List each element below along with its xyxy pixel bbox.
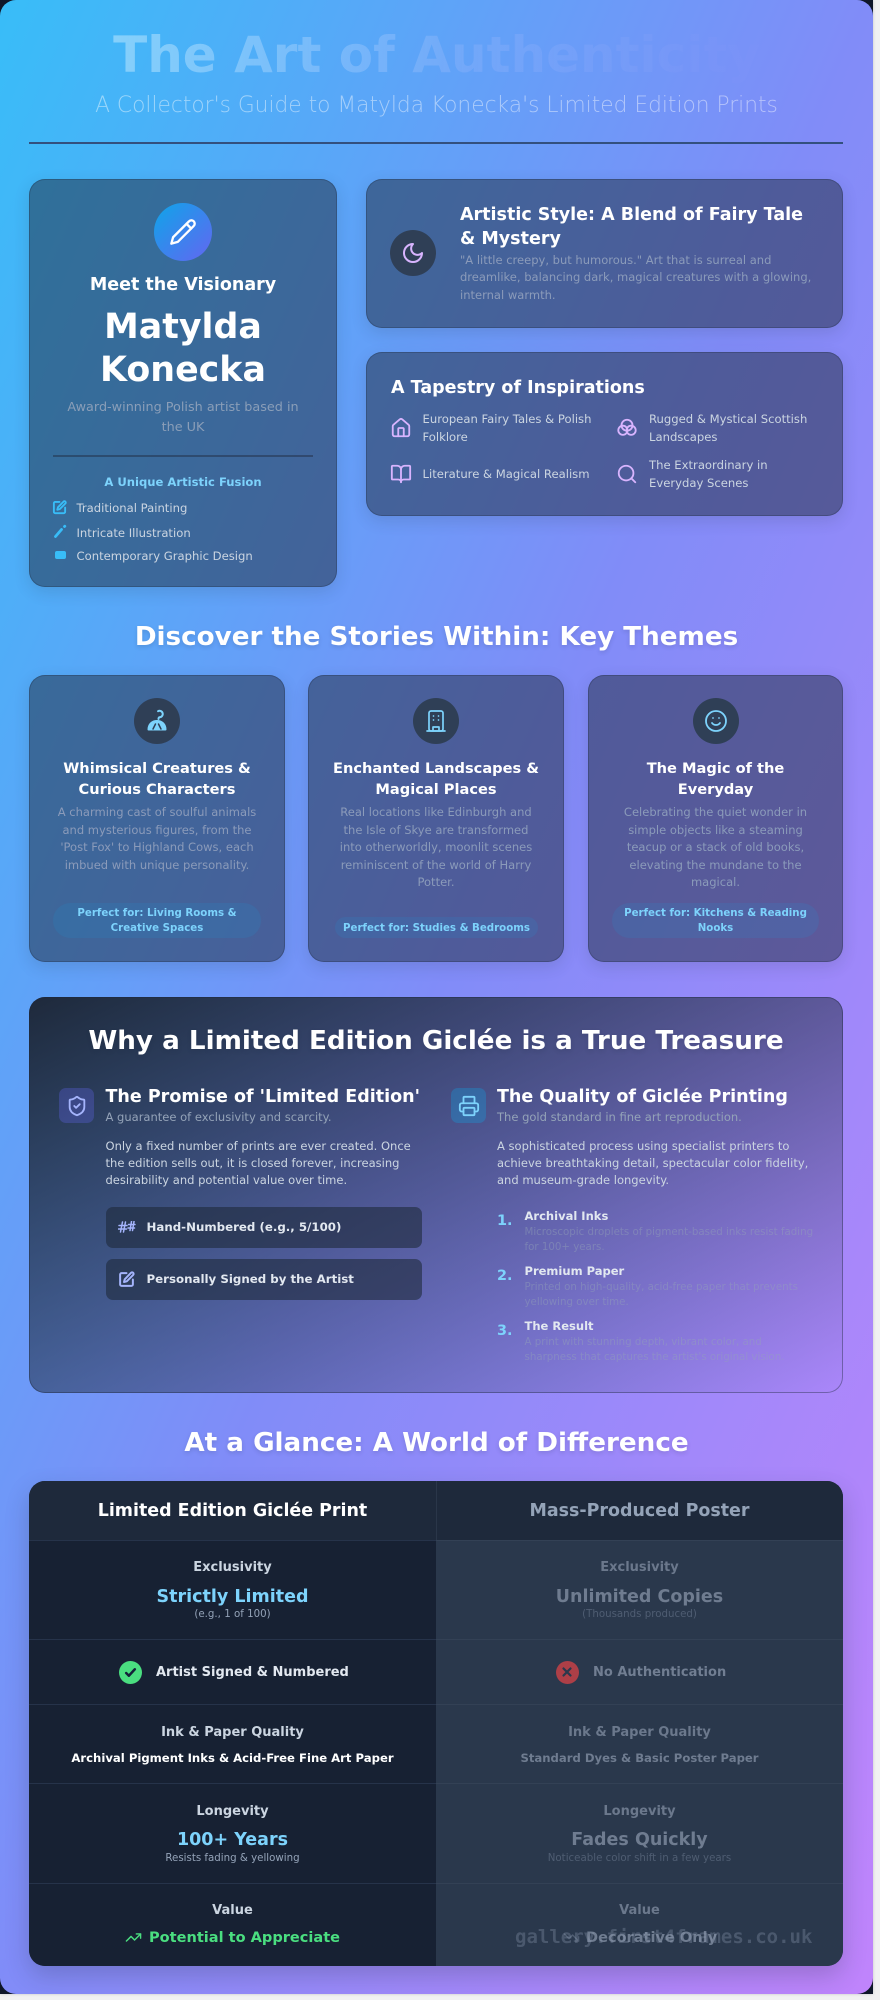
title: Curious Characters	[79, 780, 235, 798]
step 3: sharpness that captures the artist's original vision.	[524, 1351, 785, 1363]
heading: & Mystery	[460, 229, 561, 249]
artist name: Matylda	[104, 307, 262, 347]
panel: magic of the everyday	[588, 675, 843, 962]
description	[340, 805, 532, 889]
step 1: Archival Inks	[524, 1209, 608, 1223]
description: 'Post Fox' to Highland Cows, each	[60, 840, 254, 854]
step 2	[497, 1264, 798, 1308]
item: scottish landscapes	[617, 412, 807, 444]
panel: whimsical creatures	[29, 675, 285, 962]
description: A charming cast of soulful animals	[58, 805, 256, 819]
item: fairy tales: Folklore	[422, 430, 468, 444]
panel: meet the visionary	[29, 179, 337, 587]
column: giclee printing	[451, 1087, 813, 1363]
row: ink and paper: Standard Dyes & Basic Poster Paper	[520, 1751, 759, 1765]
title: The Art of Authenticity	[113, 26, 760, 84]
row: value	[29, 1883, 843, 1966]
item: scottish landscapes: Landscapes	[649, 430, 717, 444]
panel: limited edition giclee	[29, 997, 843, 1393]
row: value: Value	[212, 1903, 253, 1918]
artist name: Konecka	[100, 350, 266, 390]
item: fairy tales: European Fairy Tales & Polish	[422, 412, 591, 426]
title: Everyday	[678, 780, 753, 798]
description: into otherworldly, moonlit scenes	[340, 840, 532, 854]
heading: Meet the Visionary	[90, 275, 276, 295]
step 1: Microscopic droplets of pigment-based inks resist fading	[524, 1226, 813, 1238]
step 2: Premium Paper	[524, 1264, 624, 1278]
heading: A Tapestry of Inspirations	[391, 378, 645, 398]
tag: perfect for: Nooks	[698, 922, 733, 934]
item: literature: Literature & Magical Realism	[422, 467, 590, 481]
row: value: Decorative Only	[586, 1929, 717, 1946]
icon: smile	[692, 698, 738, 744]
description: achieve breathtaking detail, spectacular color fidelity,	[497, 1156, 808, 1170]
icon: creature	[134, 698, 180, 744]
description: reminiscent of the world of Harry	[341, 858, 531, 872]
description	[497, 1138, 808, 1187]
row: longevity	[29, 1783, 843, 1883]
description: magical.	[691, 875, 740, 889]
icon: shield	[59, 1088, 94, 1123]
fusion heading: A Unique Artistic Fusion	[104, 475, 262, 489]
row: exclusivity	[29, 1540, 843, 1639]
row: longevity: Noticeable color shift in a few years	[548, 1852, 731, 1864]
description: internal warmth.	[460, 288, 556, 302]
panel: artistic style	[366, 179, 843, 328]
comparison table	[29, 1481, 843, 1966]
description: Celebrating the quiet wonder in	[624, 805, 807, 819]
description: "A little creepy, but humorous." Art that is surreal and	[460, 252, 771, 266]
artist description: Award-winning Polish artist based in	[67, 400, 299, 415]
item: scottish landscapes: Rugged & Mystical Scottish	[649, 412, 807, 426]
heading: The Promise of 'Limited Edition'	[106, 1087, 420, 1107]
row: longevity: Longevity	[603, 1804, 676, 1819]
description: imbued with unique personality.	[65, 858, 249, 872]
row: exclusivity: Exclusivity	[193, 1560, 272, 1575]
header	[29, 26, 843, 144]
tag: perfect for: Perfect for: Kitchens & Reading	[624, 907, 807, 919]
title	[333, 760, 539, 798]
description	[460, 252, 811, 302]
step 2: yellowing over time.	[524, 1296, 629, 1308]
feature: signed: Personally Signed by the Artist	[146, 1272, 354, 1286]
item: contemporary graphic design: Contemporary Graphic Design	[76, 548, 253, 562]
panel title: Why a Limited Edition Giclée is a True Treasure	[88, 1026, 784, 1056]
heading: The Quality of Giclée Printing	[497, 1087, 788, 1107]
step 1	[497, 1209, 813, 1253]
artist name	[100, 307, 266, 390]
row: longevity: Fades Quickly	[571, 1830, 708, 1850]
item: intricate illustration: Intricate Illustration	[76, 526, 191, 540]
heading: at a glance: At a Glance: A World of Difference	[184, 1428, 689, 1458]
description: desirability and potential value over time.	[106, 1173, 347, 1187]
feature: signed	[106, 1259, 422, 1300]
row: ink and paper: Archival Pigment Inks & Acid-Free Fine Art Paper	[71, 1751, 394, 1765]
artist description: the UK	[162, 420, 204, 435]
table header: Limited Edition Giclée Print	[98, 1501, 367, 1521]
row: longevity: Longevity	[196, 1804, 269, 1819]
row: ink and paper: Ink & Paper Quality	[161, 1725, 304, 1740]
description: A sophisticated process using specialist printers to	[497, 1138, 789, 1152]
panel: inspirations	[366, 352, 843, 516]
title: Whimsical Creatures &	[63, 760, 251, 777]
row: authentication: Artist Signed & Numbered	[156, 1664, 349, 1680]
step 3	[497, 1319, 785, 1363]
subheading: A guarantee of exclusivity and scarcity.	[106, 1110, 332, 1124]
row: authentication	[29, 1639, 843, 1704]
row: value: Value	[619, 1903, 660, 1918]
panel: enchanted landscapes	[308, 675, 564, 962]
row: exclusivity: Unlimited Copies	[556, 1587, 723, 1607]
description: the Isle of Skye are transformed	[344, 822, 528, 836]
step 1: 1.	[497, 1213, 512, 1229]
tag: perfect for	[53, 903, 261, 938]
tag: perfect for: Perfect for: Living Rooms &	[77, 907, 237, 919]
table header: Mass-Produced Poster	[530, 1501, 750, 1521]
description: the edition sells out, it is closed forever, increasing	[106, 1156, 399, 1170]
row: longevity: 100+ Years	[177, 1830, 288, 1850]
description: simple objects like a steaming	[628, 822, 803, 836]
heading: key themes: Discover the Stories Within: Key Themes	[135, 622, 738, 652]
header divider	[29, 142, 843, 144]
description: and mysterious figures, from the	[62, 822, 252, 836]
fusion list	[52, 500, 253, 562]
tag: perfect for: Creative Spaces	[111, 922, 203, 934]
description: Only a fixed number of prints are ever created. Once	[106, 1138, 411, 1152]
description: Real locations like Edinburgh and	[340, 805, 532, 819]
row: exclusivity: (e.g., 1 of 100)	[194, 1608, 271, 1620]
item: extraordinary: The Extraordinary in	[649, 458, 768, 472]
feature: hand numbered	[106, 1207, 422, 1248]
feature: hand numbered: Hand-Numbered (e.g., 5/100)	[146, 1220, 341, 1234]
description	[58, 805, 256, 872]
tag: perfect for: Perfect for: Studies & Bedrooms	[343, 922, 530, 934]
description	[106, 1138, 411, 1187]
title	[646, 760, 784, 798]
step 3: A print with stunning depth, vibrant color, and	[524, 1336, 762, 1348]
heading	[460, 205, 803, 249]
tag: perfect for	[335, 917, 538, 938]
title: The Magic of the	[647, 760, 784, 777]
step 1: for 100+ years.	[524, 1241, 605, 1253]
heading: Artistic Style: A Blend of Fairy Tale	[460, 205, 803, 225]
divider	[53, 455, 313, 457]
row: exclusivity: Strictly Limited	[156, 1587, 308, 1607]
description: teacup or a stack of old books,	[627, 840, 804, 854]
item: traditional painting: Traditional Painting	[76, 501, 187, 515]
description: Potter.	[417, 875, 455, 889]
row: exclusivity: Exclusivity	[600, 1560, 679, 1575]
icon: moon	[390, 230, 436, 276]
row: longevity: Resists fading & yellowing	[165, 1852, 300, 1864]
description	[624, 805, 807, 889]
item: fairy tales	[392, 412, 591, 444]
row: exclusivity: (Thousands produced)	[582, 1608, 697, 1620]
step 3: 3.	[497, 1323, 512, 1339]
subtitle: A Collector's Guide to Matylda Konecka's Limited Edition Prints	[95, 93, 778, 118]
icon: building	[413, 698, 459, 744]
item: extraordinary	[618, 458, 768, 490]
description: elevating the mundane to the	[629, 858, 802, 872]
icon: printer	[451, 1088, 486, 1123]
title	[63, 760, 251, 798]
row: authentication: No Authentication	[593, 1664, 726, 1680]
item: literature	[390, 464, 590, 484]
description: dreamlike, balancing dark, magical creatures with a glowing,	[460, 270, 811, 284]
subheading: The gold standard in fine art reproduction.	[497, 1110, 742, 1124]
icon: pencil	[154, 203, 212, 261]
artist description	[67, 400, 299, 435]
row: value: Potential to Appreciate	[149, 1929, 340, 1946]
table header	[29, 1481, 843, 1540]
column: limited edition	[59, 1087, 422, 1300]
item: extraordinary: Everyday Scenes	[649, 476, 748, 490]
step 2: 2.	[497, 1268, 512, 1284]
row: ink and paper	[29, 1704, 843, 1783]
description: and museum-grade longevity.	[497, 1173, 669, 1187]
title: Magical Places	[375, 780, 497, 798]
tag: perfect for	[612, 903, 819, 938]
step 3: The Result	[524, 1319, 594, 1333]
watermark: gallery.first4frames.co.uk	[515, 1926, 812, 1948]
step 2: Printed on high-quality, acid-free paper that prevents	[524, 1281, 798, 1293]
row: ink and paper: Ink & Paper Quality	[568, 1725, 711, 1740]
title: Enchanted Landscapes &	[333, 760, 539, 777]
